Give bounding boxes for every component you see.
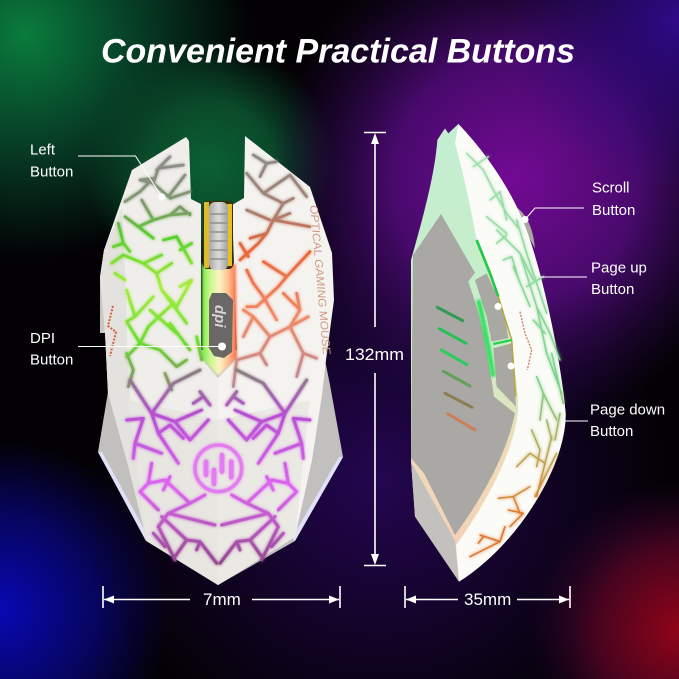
green glow seam xyxy=(477,240,516,397)
vent slots xyxy=(437,307,475,430)
callout: Page up Button xyxy=(494,260,647,310)
scroll bump xyxy=(506,203,535,248)
red stripe marks xyxy=(520,312,532,370)
cracks on band xyxy=(467,153,563,557)
left shell xyxy=(100,137,218,585)
label: 132mm: 132mm xyxy=(345,345,404,364)
right shell xyxy=(218,136,334,585)
mouse top view xyxy=(98,136,343,585)
scroll wheel xyxy=(203,201,233,270)
centre glow channel xyxy=(202,264,237,376)
outer body xyxy=(411,124,566,582)
label: 7mm: 7mm xyxy=(203,590,241,609)
side buttons xyxy=(475,273,516,407)
callout: Left Button: Button xyxy=(30,164,73,180)
callout: Scroll Button: Scroll xyxy=(592,180,630,196)
title: Convenient Practical Buttons xyxy=(101,32,575,70)
red stripe marks xyxy=(108,306,116,356)
logo xyxy=(195,445,242,492)
label: 35mm: 35mm xyxy=(464,590,511,609)
DPI button: dpi xyxy=(211,305,228,328)
callout: DPI Button xyxy=(30,330,226,368)
left side button xyxy=(100,277,106,333)
side wings xyxy=(98,350,343,585)
callout: Page up Button: Page up xyxy=(591,260,647,276)
callout: DPI Button: DPI xyxy=(30,330,55,347)
mouse side view xyxy=(411,124,566,582)
dimension: height 132mm xyxy=(364,132,386,566)
callout: Left Button xyxy=(30,142,166,200)
callout: Scroll Button: Button xyxy=(592,202,635,219)
callout: Left Button: Left xyxy=(30,142,56,158)
dimension: width 7mm xyxy=(103,586,340,608)
grey panel xyxy=(411,214,515,535)
cracks upper right xyxy=(233,155,317,387)
bottom grey base xyxy=(411,462,459,582)
optical gaming mouse lettering: OPTICAL GAMING MOUSE xyxy=(307,205,332,355)
DPI button xyxy=(209,293,233,358)
callout: DPI Button: Button xyxy=(30,352,73,368)
white crack band xyxy=(455,124,566,582)
cracks lower, purple xyxy=(127,370,310,563)
callout: Page down Button: Button xyxy=(590,423,633,440)
cracks upper left xyxy=(112,157,202,390)
callout: Page up Button: Button xyxy=(591,281,634,298)
dimension: depth 35mm xyxy=(405,586,570,608)
callout: Page down Button xyxy=(508,362,665,440)
callout: Scroll Button xyxy=(522,180,635,223)
callout: Page down Button: Page down xyxy=(590,402,665,418)
